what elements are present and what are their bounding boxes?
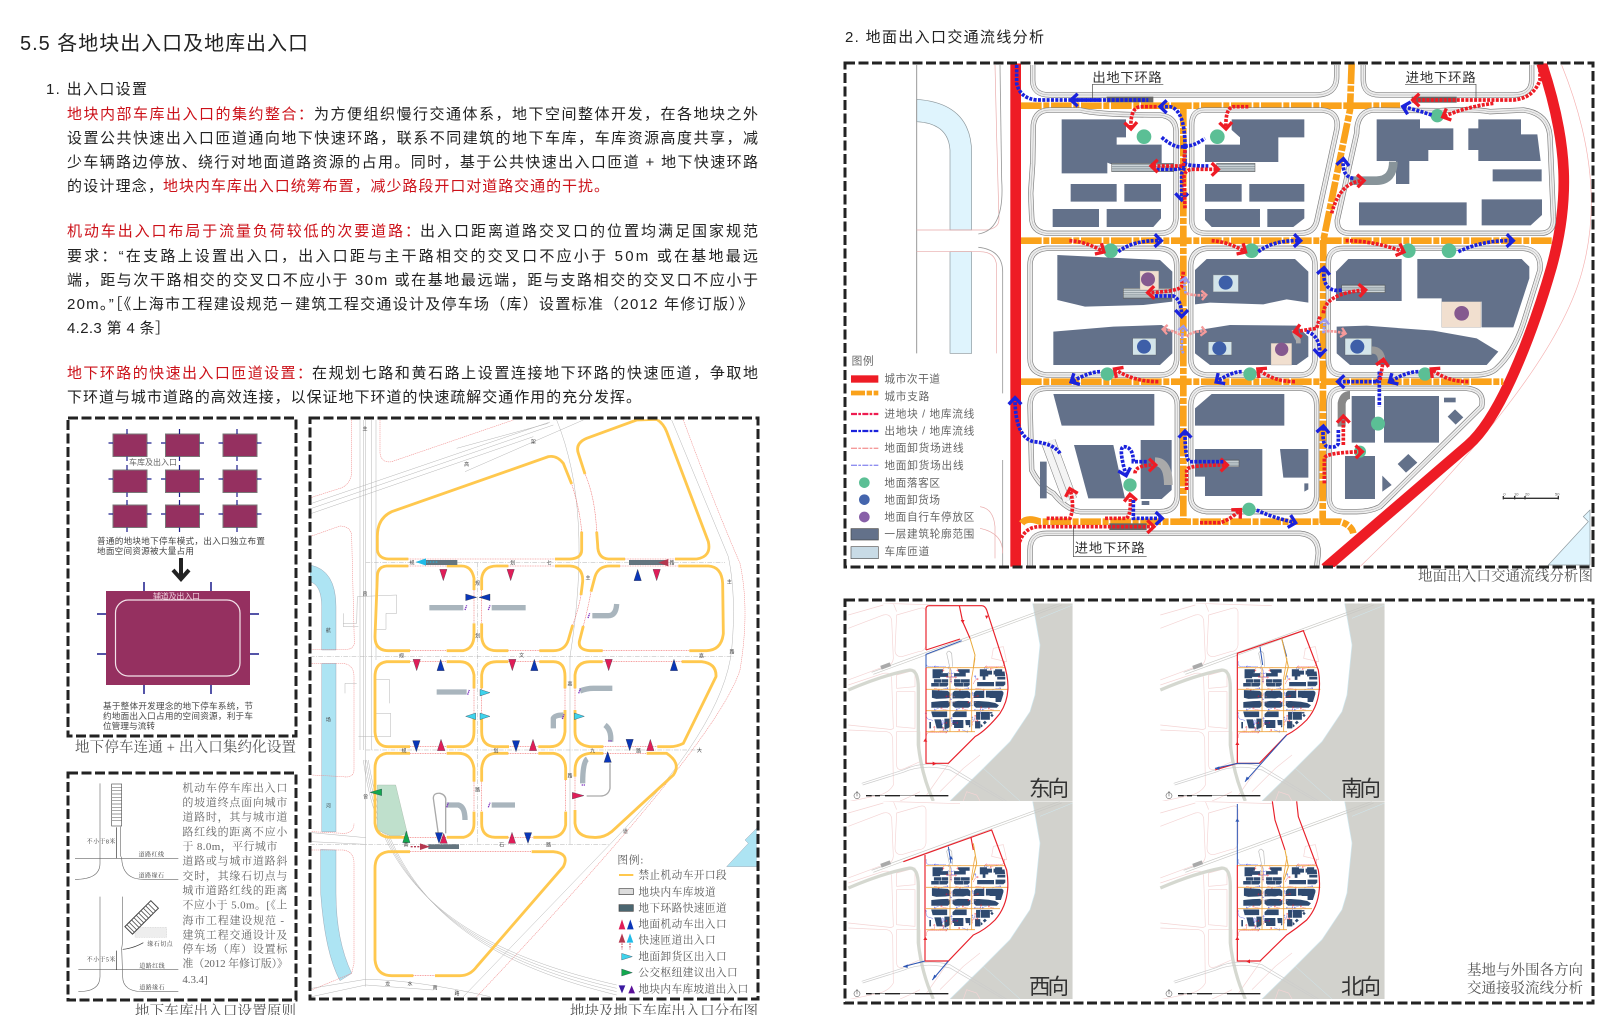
diagram: perpendicular ramp setback (75, 783, 178, 879)
panel: parking connectivity diagram (68, 418, 296, 736)
label: enter loop road north: 进地下环路 (1406, 70, 1476, 85)
road name labels: 规 (402, 747, 407, 754)
text block: entrances rationale: 地块内部车库出入口的集约整合： (67, 106, 313, 123)
text block: entrances rationale: 地块内车库出入口统筹布置，减少路段开口对道路交通的干扰。 (163, 177, 609, 195)
direction label: south: 南向 (1341, 777, 1381, 801)
diagram: perpendicular ramp setback: 道路缘石 (139, 871, 164, 879)
diagram: perpendicular ramp setback: 道路红线 (139, 851, 164, 859)
diagram: angled ramp setback: 道路红线 (139, 962, 165, 970)
text block: entrances rationale: 20m。”［《上海市工程建设规范－建筑工程交通设计及停车场（库）设置标准（2012 年修订版）》 (67, 295, 753, 313)
background roads (917, 65, 1591, 567)
legend: 地面卸货区出入口 (638, 950, 727, 963)
legend: 车库匝道 (884, 545, 930, 558)
road name labels: 曾 (363, 591, 368, 598)
text: setback rule: 的坡道终点面向城市 (182, 795, 287, 809)
road name labels: 龙 (385, 981, 390, 988)
express ramp arrows (411, 558, 668, 850)
legend: 一层建筑轮廓范围 (884, 528, 974, 541)
road name labels: 高 (464, 461, 469, 468)
road name labels: 划 (510, 560, 515, 567)
section heading: traffic flow: 2. 地面出入口交通流线分析 (845, 28, 1044, 46)
panel: ground traffic flow map (845, 63, 1593, 568)
road name labels: 南 (433, 984, 438, 991)
water corner (1548, 510, 1590, 565)
diagram: angled ramp setback: 缘石切点 (147, 940, 174, 948)
building footprints (1040, 119, 1542, 505)
road name labels: 路 (670, 560, 675, 567)
legend: 地面自行车停放区 (884, 511, 975, 524)
road name labels: 划 (494, 747, 499, 754)
diagram: angled ramp setback: 道路缘石 (139, 983, 165, 991)
text block: entrances rationale: 在规划七路和黄石路上设置连接地下环路的快速匝道，争取地 (312, 364, 758, 382)
legend: 地块内车库坡道出入口 (638, 982, 748, 995)
road name labels: 曾 (363, 793, 368, 800)
green drop-off points (1101, 109, 1456, 516)
road name labels: 路 (546, 841, 551, 848)
text: integrated parking system (103, 700, 253, 731)
label: garage and entrances: 车库及出入口 (129, 457, 177, 467)
road name labels: 文 (519, 652, 524, 659)
icon group: nine separate garages (108, 429, 262, 532)
panel: entrance distribution map (310, 418, 758, 999)
underground loop express ramps (426, 560, 667, 849)
road network lines (310, 420, 745, 997)
text: setback rule: 4.3.4] (182, 974, 208, 986)
triangles: blue entrances (413, 569, 678, 843)
panel: ramp setback principle (68, 773, 296, 1000)
road name labels: 路 (636, 747, 641, 754)
road name labels: 黄 (404, 842, 409, 849)
road name labels: 规 (399, 653, 404, 660)
scale bar: 50 (1555, 491, 1560, 496)
road name labels: 嘉 (699, 652, 704, 659)
icon: integrated garage (97, 582, 259, 694)
ramp portals (447, 605, 612, 807)
legend: 图例: (617, 853, 643, 866)
garage ramps (429, 604, 617, 820)
purple bicycle points (1141, 272, 1469, 356)
legend: 地面卸货场 (884, 493, 940, 506)
road name labels: 场 (326, 717, 331, 724)
text: ordinary parking mode: 地面空间资源被大量占用 (97, 545, 194, 556)
text block: entrances rationale: 下环道与城市道路的高效连接，以保证地下环道的快速疏解交通作用的充分发挥。 (67, 388, 641, 406)
map: north (1159, 801, 1385, 1000)
map: south (1159, 603, 1385, 802)
road name labels: 主 (727, 578, 732, 585)
legend: 地下环路快速匝道 (638, 901, 727, 914)
section heading: entrances: 1. 出入口设置 (46, 81, 147, 98)
legend: 地面卸货场进线 (884, 442, 964, 455)
road name labels: 架 (531, 439, 536, 445)
text block: entrances rationale: 机动车出入口布局于流量负荷较低的次要道路： (67, 222, 420, 240)
scale bar: 20 (1525, 491, 1530, 496)
legend: 出地块 / 地库流线 (884, 425, 975, 438)
water corner (727, 828, 757, 867)
road name labels: 主 (363, 426, 368, 433)
road name labels: 水 (408, 981, 413, 988)
road name labels: 大 (697, 747, 702, 754)
road name labels: 路 (568, 773, 573, 780)
triangles: bus hub entrances (370, 789, 410, 843)
text block: entrances rationale: 出入口距离道路交叉口的位置均满足国家规范 (420, 222, 758, 240)
text block: entrances rationale: 地下环路的快速出入口匝道设置： (67, 365, 312, 382)
page title: 5.5 各地块出入口及地库出入口 (20, 32, 308, 55)
text block: entrances rationale (67, 105, 758, 406)
diagram: angled ramp setback: 不小于5米 (87, 956, 115, 964)
map: east (847, 603, 1073, 802)
scale bar: 10 (1514, 491, 1519, 496)
text: setback rule: 停车场（库）设置标 (182, 942, 288, 956)
road name labels: 九 (590, 747, 595, 754)
striped ramps (1048, 97, 1457, 530)
text: integrated parking system: 约地面出入口占用的空间资源，利于车 (103, 710, 253, 721)
branch roads: orange (1021, 63, 1553, 533)
scale bar: 0 (1503, 491, 1506, 496)
legend: 快速匝道出入口 (638, 934, 716, 947)
legend (617, 853, 748, 995)
road name labels: 道 (623, 828, 628, 835)
text: setback rule: 路红线的距离不应小 (182, 825, 288, 839)
river (917, 99, 972, 353)
road name labels: 石 (499, 842, 504, 848)
block rings (1030, 65, 1553, 567)
road name labels: 主 (586, 575, 591, 582)
road name labels: 路 (730, 649, 735, 656)
facility pads (1133, 271, 1481, 365)
text: ordinary parking mode: 普通的地块地下停车模式，出入口独立布置 (97, 535, 265, 546)
label: enter loop road north (1405, 70, 1476, 98)
block boundaries (408, 474, 690, 976)
legend: 城市支路 (884, 390, 930, 403)
text: ordinary parking mode (97, 535, 265, 556)
text: setback rule: 城市道路红线的距离 (182, 883, 287, 897)
text block: entrances rationale: 为方便组织慢行交通体系，地下空间整体开发，在各地块之外 (314, 105, 758, 123)
road name labels: 规 (475, 580, 480, 587)
road name labels (326, 426, 735, 997)
text: setback rule: 准（2012 年修订版）》 (182, 956, 288, 970)
triangles: loading entrances (466, 689, 584, 720)
yellow no-opening segments (375, 419, 723, 976)
text: setback rule: 道路或与城市道路斜 (182, 854, 287, 868)
text block: entrances rationale: 的设计理念， (67, 177, 163, 195)
caption: external connections: 基地与外围各方向 (1467, 961, 1583, 979)
direction label: west: 西向 (1029, 975, 1069, 999)
map: west (847, 801, 1073, 1000)
text: setback rule (182, 780, 288, 986)
road name labels: 河 (326, 803, 331, 810)
legend: 城市次干道 (884, 373, 940, 386)
road name labels: 规 (410, 560, 415, 567)
diagram: perpendicular ramp setback: 不小于8米 (87, 837, 115, 845)
road name labels: 航 (326, 627, 331, 634)
caption: external connections: 交通接驳流线分析 (1467, 980, 1583, 997)
legend (851, 355, 975, 559)
legend: 地块内车库坡道 (638, 885, 716, 898)
road name labels: 路 (475, 787, 480, 794)
diagram: angled ramp setback (78, 897, 178, 992)
label: exit loop road: 出地下环路 (1092, 70, 1162, 85)
text block: entrances rationale: 少车辆路边停放、绕行对地面道路资源的占用。同时，基于公共快速出入口匝道 + 地下快速环路 (67, 154, 758, 171)
legend: 地面机动车出入口 (638, 918, 727, 931)
caption: parking connectivity: 地下停车连通 + 出入口集约化设置 (75, 739, 296, 756)
text block: entrances rationale: 要求：“在支路上设置出入口，出入口距与主干路相交的交叉口不应小于 50m 或在基地最远 (67, 247, 758, 265)
text: setback rule: 海市工程建设规范 - (182, 913, 284, 927)
legend: 进地块 / 地库流线 (884, 407, 975, 420)
flow lines (1015, 65, 1540, 563)
legend: 地面卸货场出线 (884, 459, 964, 472)
direction label: north: 北向 (1341, 975, 1381, 999)
road name labels: 路 (455, 990, 460, 997)
label: exit loop road (1092, 70, 1163, 98)
label: auxiliary road and entrances: 辅道及出入口 (153, 591, 200, 601)
bus hub area (377, 785, 407, 836)
text: setback rule: 交时，其缘石切点与 (182, 868, 287, 882)
triangles: ground vehicle entrances (413, 569, 660, 843)
river (310, 565, 352, 981)
label: enter loop road south: 进地下环路 (1075, 541, 1145, 556)
blue loading points (1137, 276, 1364, 355)
legend: 地面落客区 (884, 476, 940, 489)
label: enter loop road south (1073, 527, 1147, 557)
text block: entrances rationale: 4.2.3 第 4 条］ (67, 319, 170, 337)
road name labels: 划 (475, 632, 480, 639)
road name labels: 嘉 (568, 680, 573, 687)
secondary road: red (1016, 63, 1564, 568)
text: setback rule: 建筑工程交通设计及 (182, 927, 287, 941)
text: integrated parking system: 位管理与流转 (103, 720, 155, 731)
caption: external connections (1467, 961, 1583, 997)
direction label: east: 东向 (1029, 777, 1069, 801)
text: setback rule: 道路时，其与城市道 (182, 810, 287, 824)
panel: external connection maps (845, 600, 1593, 1003)
text block: entrances rationale: 设置公共快速出入口匝道通向地下快速环路，联系不同建筑的地下车库，车库资源高度共享，减 (67, 130, 758, 147)
legend: 禁止机动车开口段 (638, 869, 727, 882)
legend: 图例 (852, 355, 874, 368)
caption: flow map: 地面出入口交通流线分析图 (1418, 568, 1593, 585)
text: setback rule: 机动车停车库出入口 (182, 780, 287, 794)
text: setback rule: 不应小于 5.0m。[《上 (182, 898, 287, 912)
road name labels: 七 (547, 560, 552, 567)
text: integrated parking system: 基于整体开发理念的地下停车系统，节 (103, 700, 253, 711)
text block: entrances rationale: 端，距与次干路相交的交叉口不应小于 30m 或在基地最远端，距与支路相交的交叉口不应小于 (67, 271, 758, 289)
arrow: down (173, 558, 189, 579)
text: setback rule: 于 8.0m，平行城市 (182, 840, 277, 853)
scale bar (1502, 493, 1560, 500)
legend: 公交枢纽建议出入口 (638, 966, 738, 979)
